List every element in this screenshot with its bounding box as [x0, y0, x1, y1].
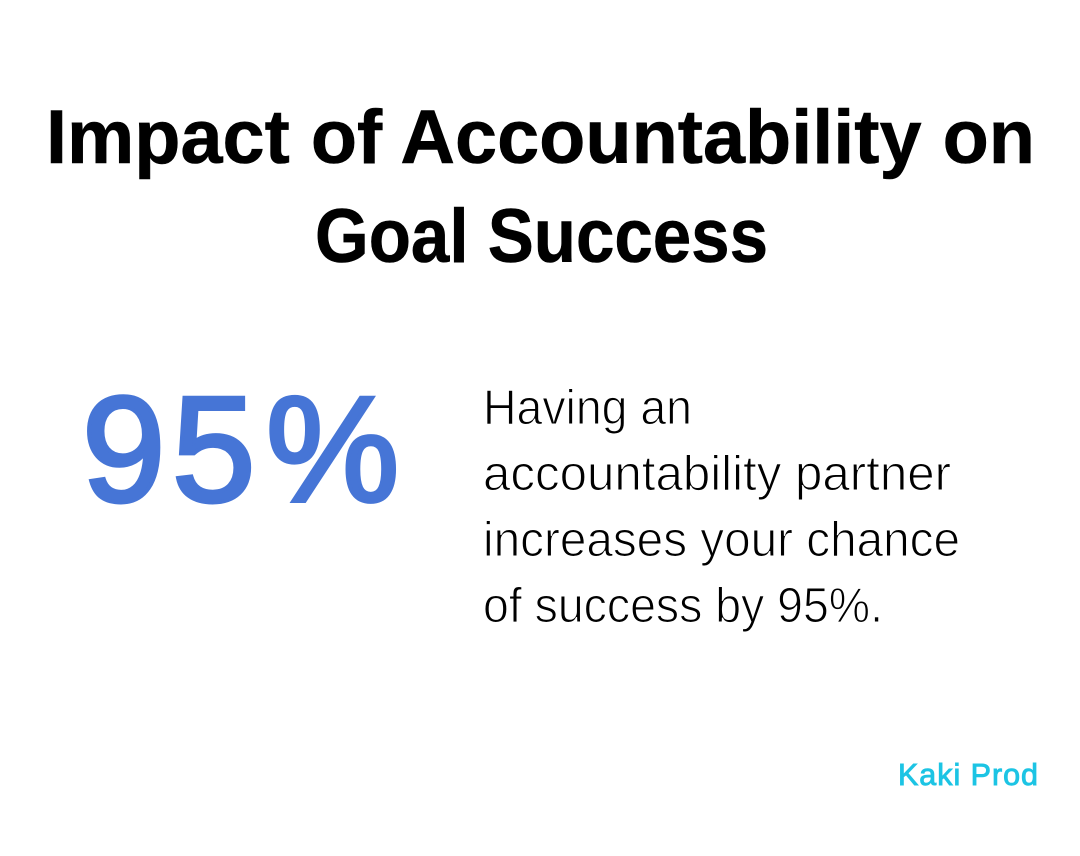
logo: Kaki Prod: Kaki Prod: [898, 758, 1038, 792]
title: Impact of Accountability on: [46, 95, 1035, 180]
title: [46, 95, 1035, 279]
big stat: 95%: 95%: [82, 365, 399, 533]
stat description: accountability partner: [483, 447, 951, 501]
stat description: of success by 95%.: [483, 579, 883, 633]
stat description: [483, 381, 960, 633]
stat description: increases your chance: [483, 513, 960, 567]
title: Goal Success: [315, 194, 768, 279]
stat description: Having an: [483, 381, 692, 435]
